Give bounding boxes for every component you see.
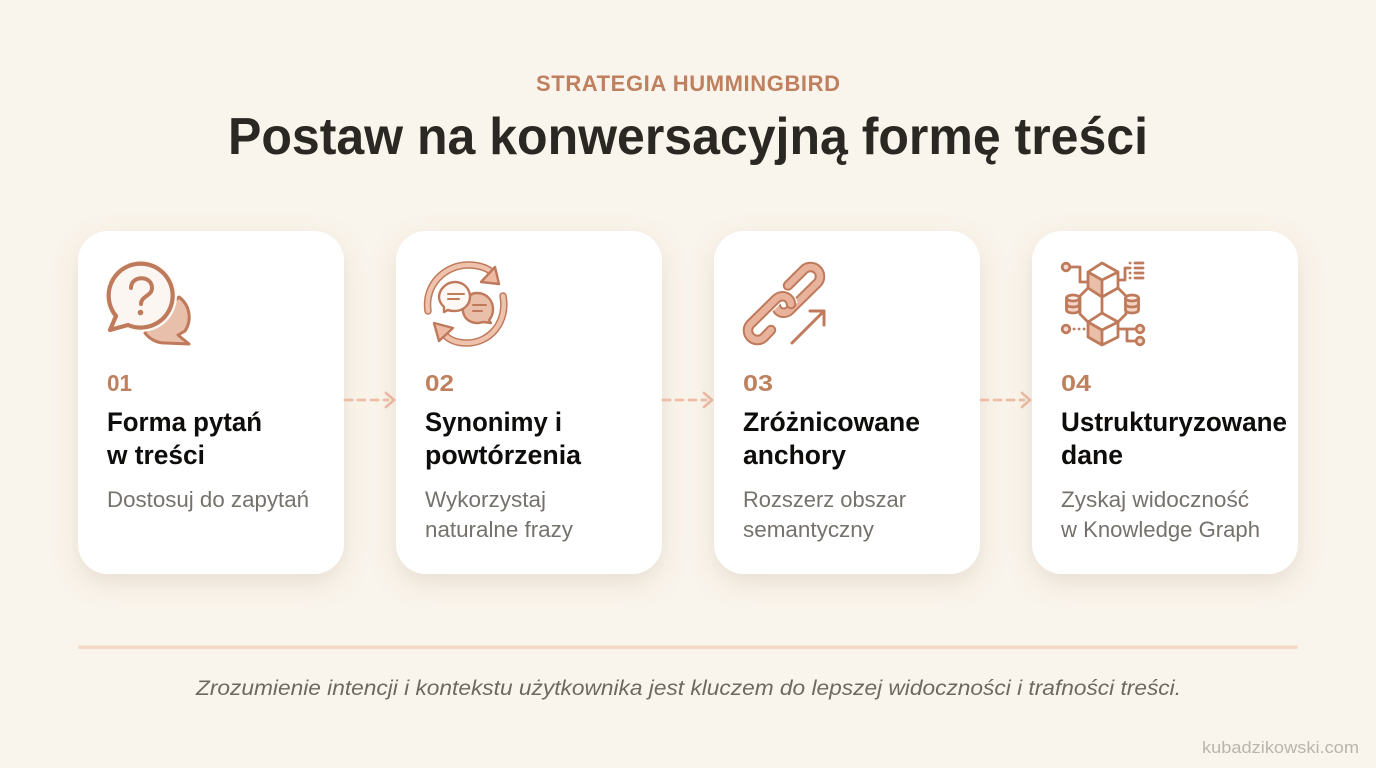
- title: Postaw na konwersacyjną formę treści: [228, 108, 1148, 166]
- card heading: powtórzenia: [425, 440, 581, 470]
- icon: cycle with chat bubbles: [428, 265, 504, 343]
- card description: [1060, 487, 1260, 542]
- card description: Rozszerz obszar: [743, 487, 906, 512]
- panel: card 4: [1032, 231, 1298, 574]
- icon: question speech bubbles: [105, 260, 189, 344]
- card heading: w treści: [106, 440, 205, 470]
- card heading: dane: [1061, 440, 1123, 470]
- eyebrow: STRATEGIA HUMMINGBIRD: [536, 71, 840, 96]
- card description: Wykorzystaj: [425, 487, 546, 512]
- panel: card 1: [78, 231, 344, 574]
- card heading: [106, 407, 262, 470]
- card description: [425, 487, 573, 542]
- card description: [743, 487, 906, 542]
- watermark: kubadzikowski.com: [1202, 739, 1359, 757]
- panel: card 3: [714, 231, 980, 574]
- card heading: Forma pytań: [107, 407, 262, 437]
- card description: Zyskaj widoczność: [1061, 487, 1249, 512]
- card heading: [743, 407, 920, 470]
- arrow: 1 to 2: [345, 393, 394, 407]
- card heading: [1061, 407, 1287, 470]
- arrow: 2 to 3: [663, 393, 712, 407]
- icon: chain link with arrow: [748, 267, 824, 343]
- card heading: Zróżnicowane: [743, 407, 920, 437]
- icon: structured data network: [1062, 263, 1144, 345]
- card heading: anchory: [743, 440, 846, 470]
- step number: 03: [743, 370, 773, 396]
- card heading: [425, 407, 581, 470]
- step number: 01: [107, 370, 132, 396]
- footer statement: Zrozumienie intencji i kontekstu użytkownika jest kluczem do lepszej widoczności i trafności treści.: [195, 676, 1181, 700]
- card description: semantyczny: [743, 517, 874, 542]
- card description: naturalne frazy: [425, 517, 573, 542]
- step number: 04: [1061, 370, 1091, 396]
- card heading: Synonimy i: [425, 407, 562, 437]
- panel: card 2: [396, 231, 662, 574]
- card description: w Knowledge Graph: [1060, 517, 1260, 542]
- card description: Dostosuj do zapytań: [107, 487, 309, 512]
- step number: 02: [425, 370, 454, 396]
- arrow: 3 to 4: [981, 393, 1030, 407]
- card heading: Ustrukturyzowane: [1061, 407, 1287, 437]
